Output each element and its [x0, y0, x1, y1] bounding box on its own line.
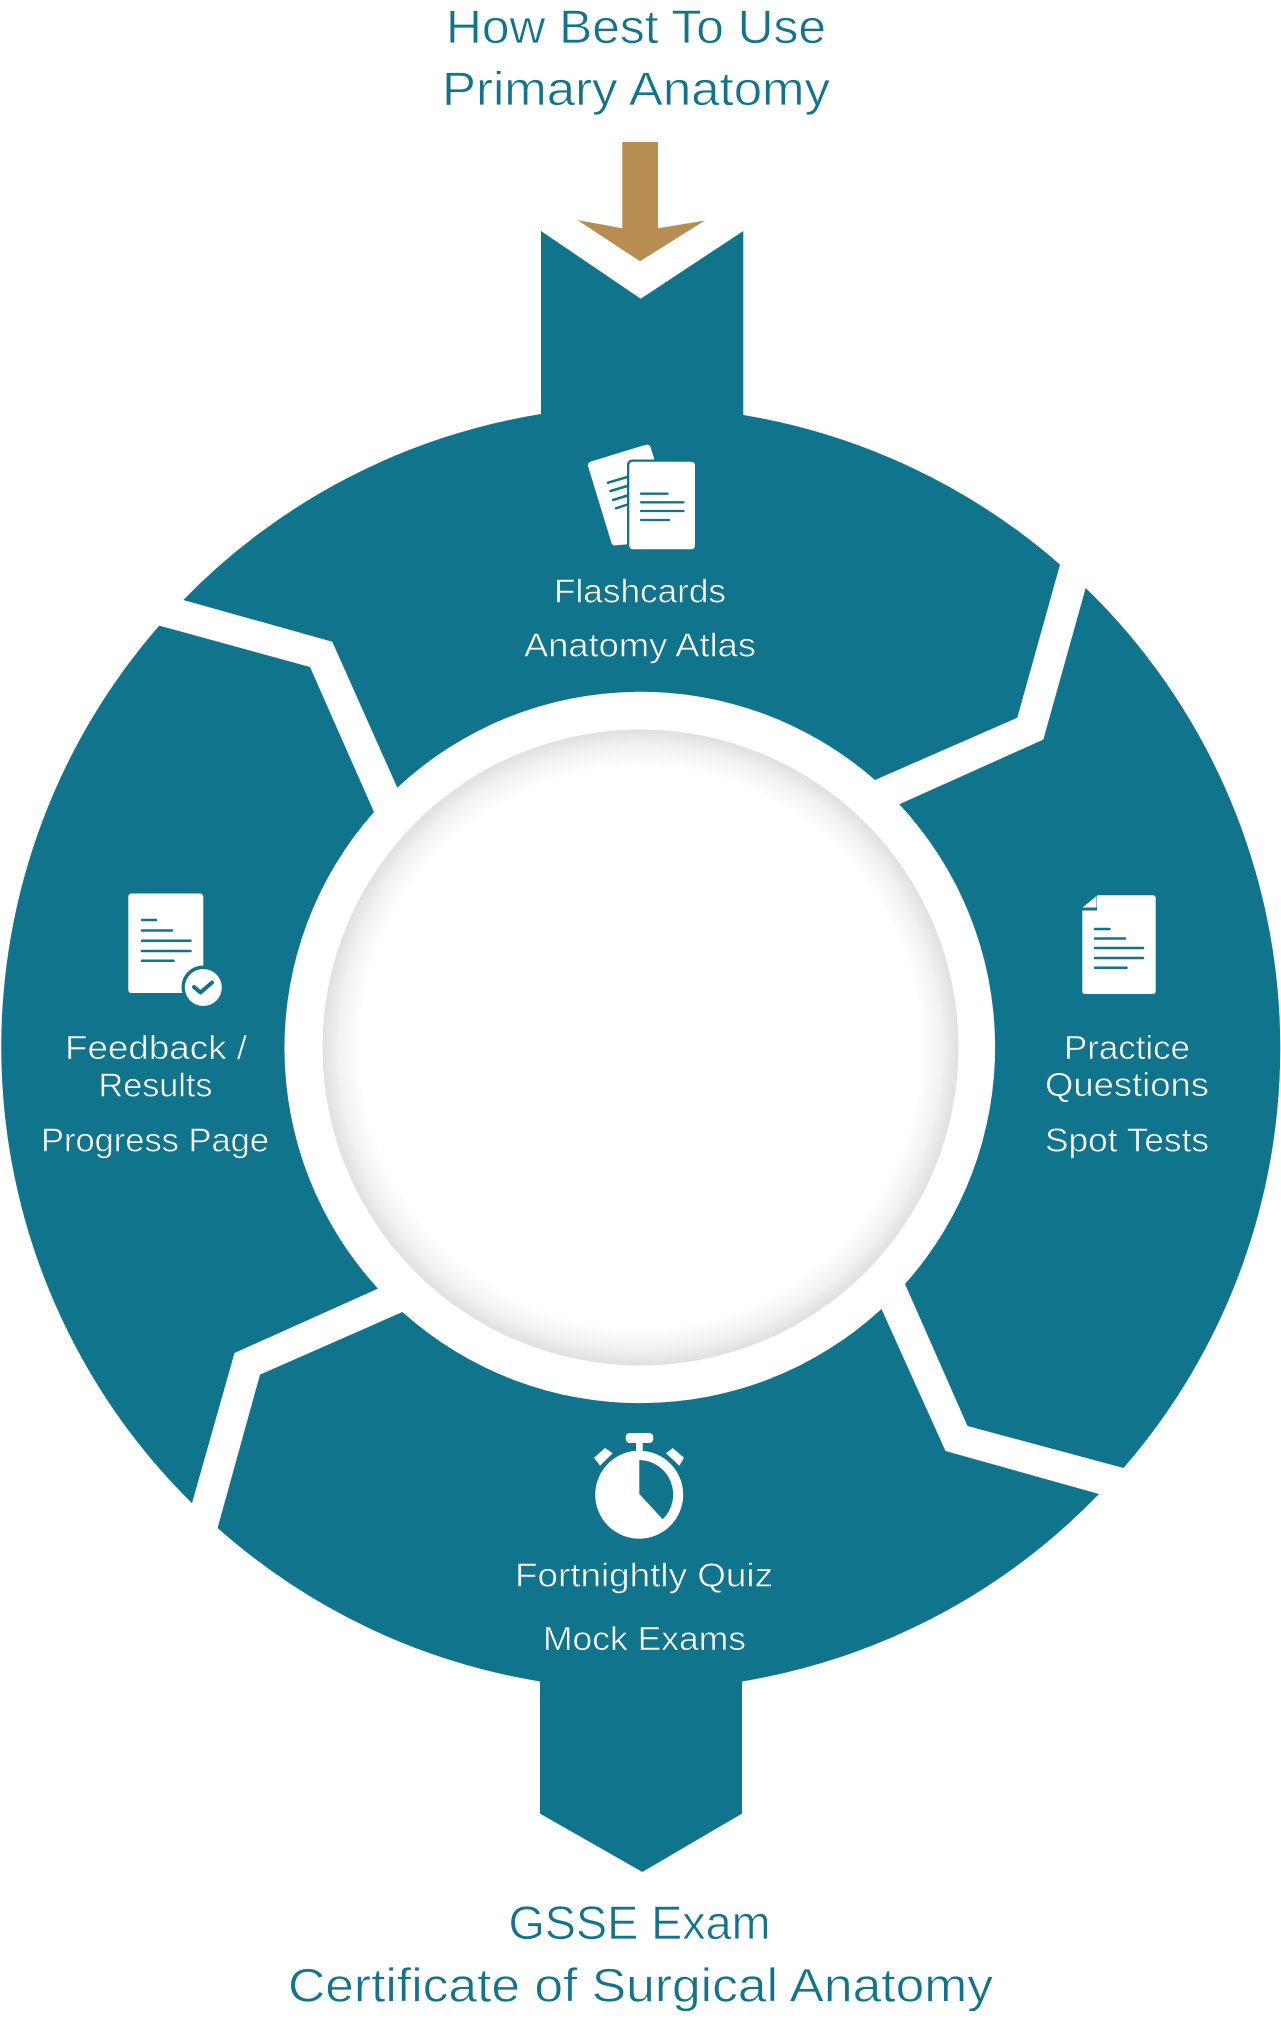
text: flashcards labels: Anatomy Atlas — [524, 626, 756, 664]
icon: flashcards — [588, 445, 696, 550]
panel: top segment with notched stem — [183, 231, 1060, 788]
text: flashcards labels: Flashcards — [554, 572, 726, 610]
icon: document with check badge — [128, 894, 224, 1008]
text: feedback labels: Feedback / — [65, 1029, 248, 1066]
text: quiz labels: Mock Exams — [543, 1620, 746, 1657]
text: practice labels: Spot Tests — [1045, 1122, 1209, 1158]
text: quiz labels: Fortnightly Quiz — [515, 1556, 773, 1594]
text: feedback labels — [41, 1029, 269, 1158]
centre disc — [322, 730, 958, 1366]
text: exam outcome heading: Certificate of Surgical Anatomy — [288, 1958, 994, 2012]
text: flashcards labels — [524, 572, 756, 664]
text: feedback labels: Progress Page — [41, 1122, 269, 1158]
title: How Best To Use — [446, 0, 826, 53]
panel: bottom segment with pointed stem — [218, 1309, 1099, 1872]
text: quiz labels — [515, 1556, 773, 1657]
icon: document with folded corner — [1082, 895, 1156, 994]
text: exam outcome heading — [288, 1896, 994, 2012]
text: practice labels — [1045, 1029, 1209, 1158]
title — [442, 0, 831, 115]
panel: left segment — [1, 626, 378, 1503]
text: exam outcome heading: GSSE Exam — [508, 1896, 770, 1949]
text: feedback labels: Results — [98, 1066, 212, 1104]
arrow: gold entry arrow — [577, 142, 705, 261]
text: practice labels: Practice — [1064, 1029, 1190, 1066]
panel: right segment — [899, 588, 1280, 1468]
text: practice labels: Questions — [1045, 1066, 1209, 1103]
icon: stopwatch — [594, 1433, 684, 1539]
title: Primary Anatomy — [442, 62, 831, 115]
